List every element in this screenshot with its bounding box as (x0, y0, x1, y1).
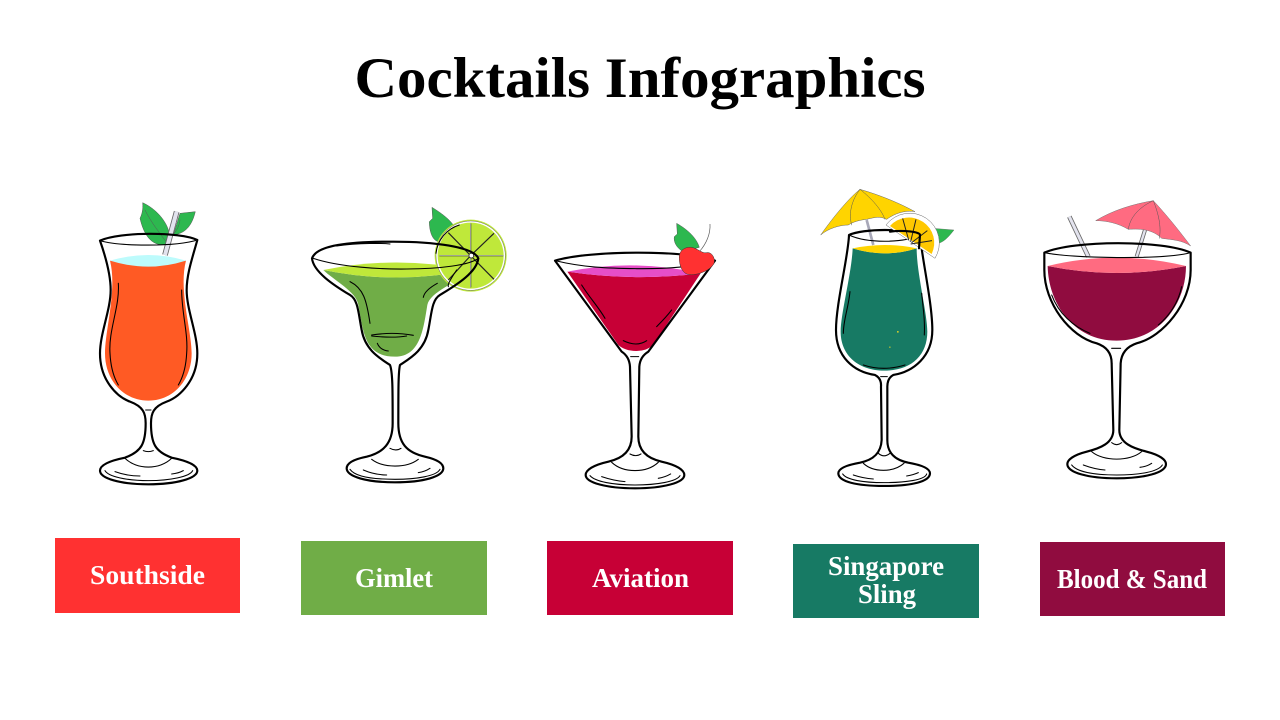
icon: mint leaf (933, 228, 954, 243)
label: Gimlet: Gimlet (355, 563, 433, 593)
drink (105, 255, 192, 401)
glass outline (312, 242, 478, 482)
label: Singapore Sling: Singapore (828, 551, 944, 581)
icon: mint leaves (140, 203, 195, 245)
glass outline (555, 253, 715, 488)
icon: yellow umbrella (821, 189, 915, 235)
icon: straw (1069, 217, 1088, 257)
illustration: Blood and Sand glass (1044, 201, 1191, 478)
illustration: Aviation glass (555, 223, 715, 488)
drink (323, 262, 470, 357)
icon: mint leaf (429, 207, 453, 242)
illustration: Gimlet glass (312, 207, 507, 482)
glass outline (836, 230, 932, 486)
illustration: Southside glass (100, 203, 197, 484)
label: Aviation (547, 541, 733, 615)
icon: cherry (679, 224, 714, 275)
icon: lime slice (435, 220, 507, 292)
label: Southside: Southside (90, 560, 205, 590)
icon: straw (165, 212, 177, 255)
glass outline (100, 234, 197, 484)
icon: mint leaf (674, 223, 699, 252)
label: Southside (55, 538, 240, 613)
icon: umbrella straw (867, 220, 873, 245)
title: Cocktails Infographics (354, 47, 925, 110)
label: Singapore Sling (793, 544, 979, 618)
drink (841, 245, 927, 371)
drink (1048, 258, 1186, 341)
icon: pink umbrella (1096, 201, 1191, 246)
glass outline (1044, 243, 1191, 478)
icon: orange slice (886, 213, 939, 258)
drink (567, 265, 701, 351)
label: Blood and Sand: Blood & Sand (1057, 564, 1207, 594)
label: Blood and Sand (1040, 542, 1225, 616)
label: Gimlet (301, 541, 487, 615)
label: Singapore Sling: Sling (858, 579, 916, 609)
icon: umbrella stick (1137, 230, 1145, 257)
label: Aviation: Aviation (592, 563, 689, 593)
illustration: Singapore Sling glass (821, 189, 954, 486)
